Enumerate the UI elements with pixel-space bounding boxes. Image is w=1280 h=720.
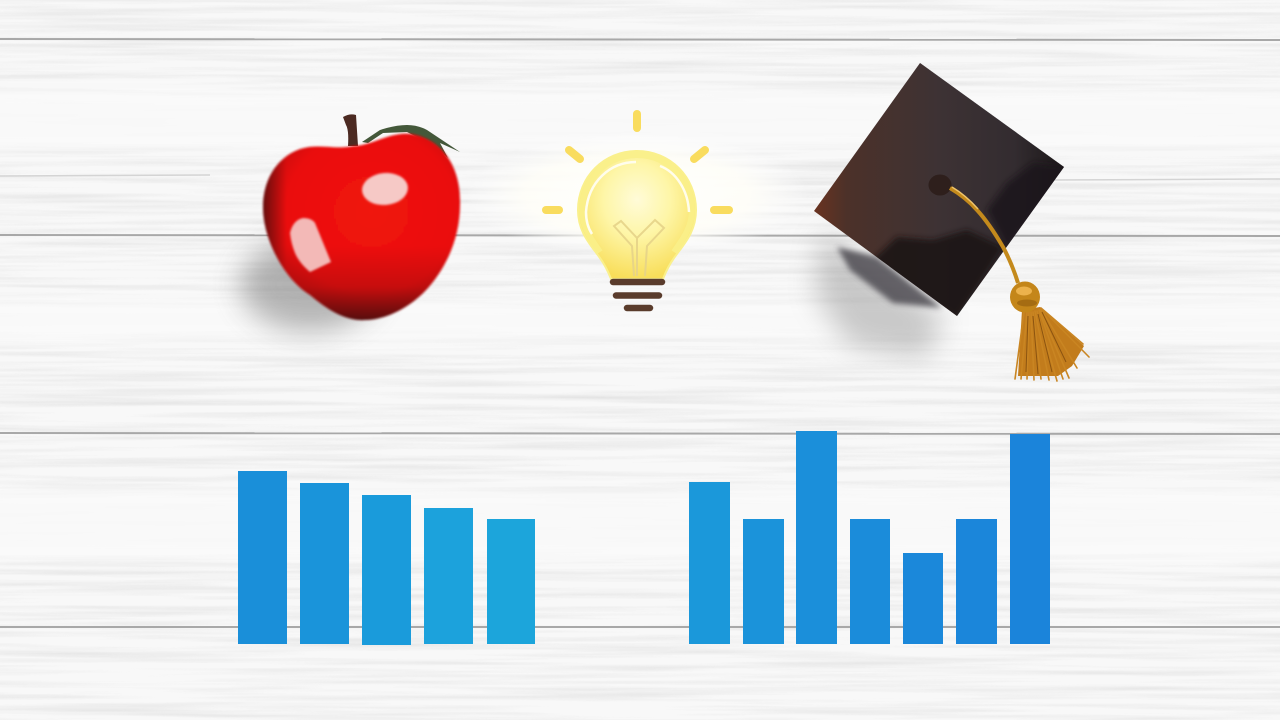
cap board bbox=[814, 63, 1064, 316]
icon: light bulb bbox=[465, 114, 809, 308]
cap button bbox=[928, 174, 952, 196]
cap shading bbox=[870, 55, 1070, 320]
apple highlight: lower bbox=[290, 218, 331, 272]
tassel cord bbox=[950, 188, 1018, 283]
icon: red apple bbox=[240, 114, 460, 331]
bar chart: left, five descending bars bbox=[238, 471, 535, 645]
apple leaf bbox=[362, 125, 460, 158]
bulb filament bbox=[614, 220, 664, 276]
cap shadow bbox=[815, 232, 945, 358]
tassel fringe bbox=[1018, 307, 1084, 376]
bulb rays bbox=[546, 114, 729, 210]
apple highlight: upper bbox=[361, 171, 409, 207]
apple stem bbox=[343, 114, 358, 146]
apple body bbox=[263, 134, 460, 320]
bulb base bbox=[613, 282, 662, 308]
bulb rim bbox=[582, 155, 692, 252]
bar chart: right, seven varied bars bbox=[689, 431, 1050, 644]
bulb glass bbox=[578, 151, 696, 279]
icon: graduation cap bbox=[814, 55, 1089, 381]
tassel knot bbox=[1010, 282, 1040, 312]
